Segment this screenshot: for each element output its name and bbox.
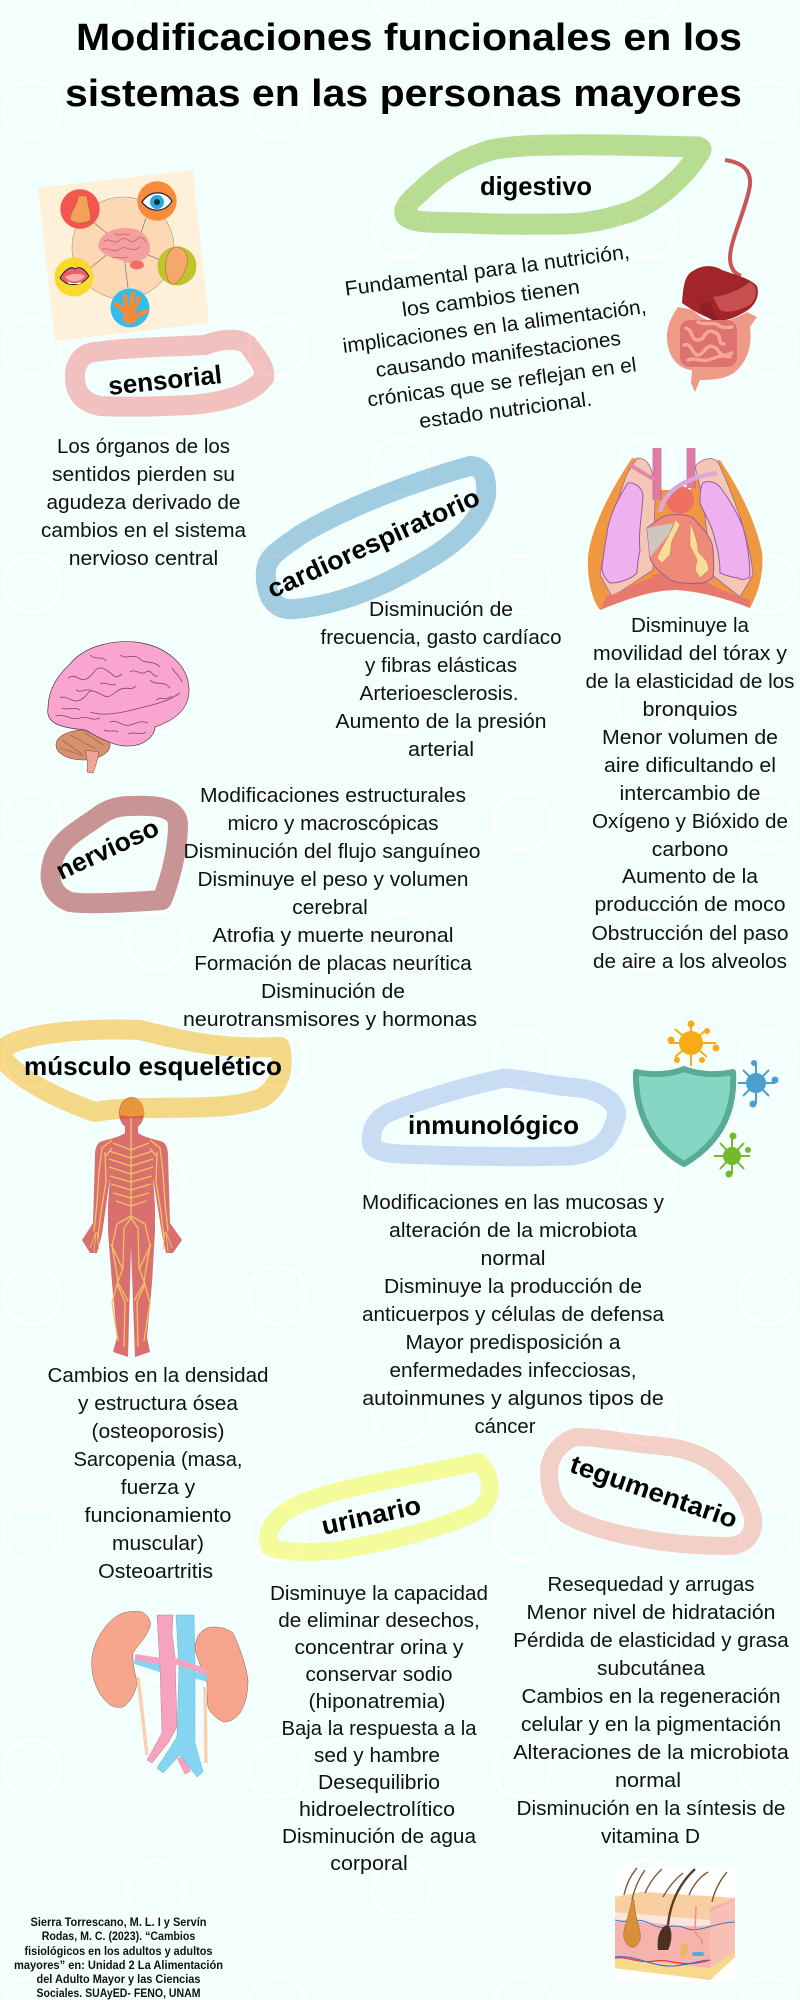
text block: músculo esquelético: funcionamiento: [84, 1504, 232, 1527]
text block: urinario: sed y hambre: [314, 1744, 440, 1767]
text block: pulmones: carbono: [652, 838, 728, 861]
text block: pulmones: producción de moco: [594, 893, 786, 916]
text block: tegumentario: subcutánea: [597, 1657, 706, 1680]
text block: inmunológico: [362, 1191, 665, 1438]
text block: inmunológico: alteración de la microbiota: [389, 1219, 638, 1242]
text block: nervioso: neurotransmisores y hormonas: [183, 1008, 477, 1031]
citation: fisiológicos en los adultos y adultos: [24, 1946, 212, 1958]
heading: tegumentario: [549, 1437, 753, 1546]
text block: sensorial: Los órganos de los: [57, 435, 230, 458]
text block: cardiorespiratorio: Aumento de la presión: [336, 710, 546, 733]
text block: sensorial: sentidos pierden su: [52, 463, 235, 486]
icon: brain: [48, 642, 189, 773]
text block: urinario: (hiponatremia): [308, 1690, 446, 1713]
heading: sensorial: sensorial: [107, 359, 223, 401]
text block: inmunológico: anticuerpos y células de defensa: [362, 1303, 665, 1326]
icon: lungs and heart: [588, 448, 762, 610]
text block: pulmones: Oxígeno y Bióxido de: [592, 810, 788, 833]
text block: cardiorespiratorio: [320, 598, 562, 761]
text block: inmunológico: cáncer: [474, 1415, 536, 1438]
heading: urinario: [268, 1462, 490, 1552]
text block: músculo esquelético: Osteoartritis: [98, 1560, 213, 1583]
citation: Sociales. SUAyED- FENO, UNAM: [36, 1988, 200, 2000]
text block: pulmones: Disminuye la: [631, 614, 750, 637]
text block: tegumentario: Cambios en la regeneración: [522, 1685, 780, 1708]
text block: sensorial: agudeza derivado de: [46, 491, 240, 514]
heading: músculo esquelético: [2, 1030, 282, 1116]
heading: urinario: urinario: [319, 1490, 424, 1541]
text block: sensorial: nervioso central: [69, 547, 218, 570]
text block: urinario: corporal: [330, 1852, 408, 1875]
text block: pulmones: bronquios: [642, 698, 738, 721]
heading: sensorial: [75, 340, 264, 407]
text block: inmunológico: autoinmunes y algunos tipos de: [362, 1387, 664, 1410]
text block: digestivo: estado nutricional.: [418, 388, 593, 433]
text block: pulmones: intercambio de: [620, 782, 760, 805]
text block: nervioso: [183, 784, 480, 1031]
text block: tegumentario: Menor nivel de hidratación: [526, 1601, 776, 1624]
icon: skin cross-section: [615, 1868, 736, 1982]
text block: nervioso: Disminución del flujo sanguíneo: [184, 840, 480, 863]
text block: digestivo: Fundamental para la nutrición,: [343, 240, 631, 301]
text block: sensorial: [41, 435, 247, 570]
text block: músculo esquelético: Cambios en la densidad: [48, 1364, 268, 1387]
text block: urinario: conservar sodio: [306, 1663, 452, 1686]
text block: cardiorespiratorio: arterial: [408, 738, 474, 761]
text block: tegumentario: normal: [615, 1769, 681, 1792]
text block: tegumentario: Resequedad y arrugas: [548, 1573, 754, 1596]
text block: nervioso: cerebral: [292, 896, 368, 919]
icon: digestive system: [667, 160, 758, 392]
text block: músculo esquelético: (osteoporosis): [92, 1420, 224, 1443]
text block: tegumentario: Disminución en la síntesis de: [516, 1797, 786, 1820]
text block: pulmones: aire dificultando el: [604, 754, 776, 777]
citation: Rodas, M. C. (2023). “Cambios: [42, 1931, 195, 1943]
heading: digestivo: [405, 145, 701, 224]
heading: inmunológico: inmunológico: [408, 1110, 579, 1140]
text block: músculo esquelético: Sarcopenia (masa,: [74, 1448, 242, 1471]
text block: urinario: de eliminar desechos,: [278, 1609, 480, 1632]
text block: pulmones: de aire a los alveolos: [593, 950, 787, 973]
title: [65, 17, 742, 115]
text block: digestivo: crónicas que se reflejan en el: [366, 353, 638, 411]
text block: cardiorespiratorio: Arterioesclerosis.: [360, 682, 518, 705]
heading: cardiorespiratorio: cardiorespiratorio: [262, 482, 484, 604]
icon: kidneys: [92, 1611, 248, 1777]
text block: sensorial: cambios en el sistema: [41, 519, 247, 542]
citation: Sierra Torrescano, M. L. I y Servín: [30, 1917, 206, 1929]
text block: músculo esquelético: y estructura ósea: [78, 1392, 239, 1415]
text block: nervioso: Atrofia y muerte neuronal: [212, 924, 454, 947]
text block: urinario: [270, 1582, 488, 1875]
icon: shield with viruses: [636, 1022, 778, 1176]
text block: tegumentario: [513, 1573, 789, 1848]
text block: pulmones: Menor volumen de: [602, 726, 778, 749]
text block: músculo esquelético: muscular): [112, 1532, 204, 1555]
text block: nervioso: Disminución de: [261, 980, 405, 1003]
text block: urinario: Disminuye la capacidad: [270, 1582, 488, 1605]
text block: digestivo: causando manifestaciones: [374, 327, 622, 382]
text block: urinario: Desequilibrio: [318, 1771, 440, 1794]
text block: tegumentario: Alteraciones de la microbiota: [513, 1741, 789, 1764]
title: Modificaciones funcionales en los: [76, 17, 742, 59]
text block: cardiorespiratorio: y fibras elásticas: [365, 654, 517, 677]
text block: músculo esquelético: [48, 1364, 268, 1583]
text block: cardiorespiratorio: Disminución de: [369, 598, 513, 621]
heading: nervioso: [51, 806, 178, 903]
text block: nervioso: Disminuye el peso y volumen: [198, 868, 468, 891]
text block: urinario: Baja la respuesta a la: [282, 1717, 477, 1740]
text block: cardiorespiratorio: frecuencia, gasto cardíaco: [320, 626, 562, 649]
text block: inmunológico: Modificaciones en las mucosas y: [362, 1191, 665, 1214]
heading: nervioso: nervioso: [51, 812, 163, 886]
text block: inmunológico: Mayor predisposición a: [406, 1331, 621, 1354]
heading: músculo esquelético: músculo esquelético: [24, 1051, 282, 1081]
text block: digestivo: implicaciones en la alimentación,: [341, 295, 648, 358]
heading: digestivo: digestivo: [480, 171, 592, 201]
text block: inmunológico: enfermedades infecciosas,: [390, 1359, 636, 1382]
heading: inmunológico: [371, 1078, 617, 1157]
text block: tegumentario: celular y en la pigmentación: [521, 1713, 781, 1736]
citation: [14, 1917, 223, 2000]
icon: human body nervous system: [82, 1097, 182, 1357]
icon: senses card: [38, 170, 209, 341]
text block: urinario: Disminución de agua: [282, 1825, 477, 1848]
text block: pulmones: movilidad del tórax y: [593, 642, 788, 665]
heading: tegumentario: tegumentario: [566, 1449, 742, 1534]
text block: pulmones: Aumento de la: [622, 865, 759, 888]
citation: del Adulto Mayor y las Ciencias: [36, 1974, 200, 1986]
text block: nervioso: Modificaciones estructurales: [200, 784, 466, 807]
text block: pulmones: de la elasticidad de los: [586, 670, 794, 693]
text block: nervioso: Formación de placas neurítica: [194, 952, 472, 975]
text block: tegumentario: vitamina D: [601, 1825, 700, 1848]
citation: mayores” en: Unidad 2 La Alimentación: [14, 1960, 223, 1972]
text block: nervioso: micro y macroscópicas: [228, 812, 438, 835]
title: sistemas en las personas mayores: [65, 73, 742, 115]
text block: inmunológico: Disminuye la producción de: [384, 1275, 642, 1298]
text block: pulmones: [586, 614, 794, 973]
text block: urinario: hidroelectrolítico: [299, 1798, 455, 1821]
text block: digestivo: [334, 239, 659, 442]
text block: inmunológico: normal: [480, 1247, 546, 1270]
text block: músculo esquelético: fuerza y: [121, 1476, 196, 1499]
text block: urinario: concentrar orina y: [294, 1636, 464, 1659]
text block: digestivo: los cambios tienen: [401, 275, 581, 322]
text block: pulmones: Obstrucción del paso: [592, 922, 788, 945]
text block: tegumentario: Pérdida de elasticidad y grasa: [513, 1629, 789, 1652]
